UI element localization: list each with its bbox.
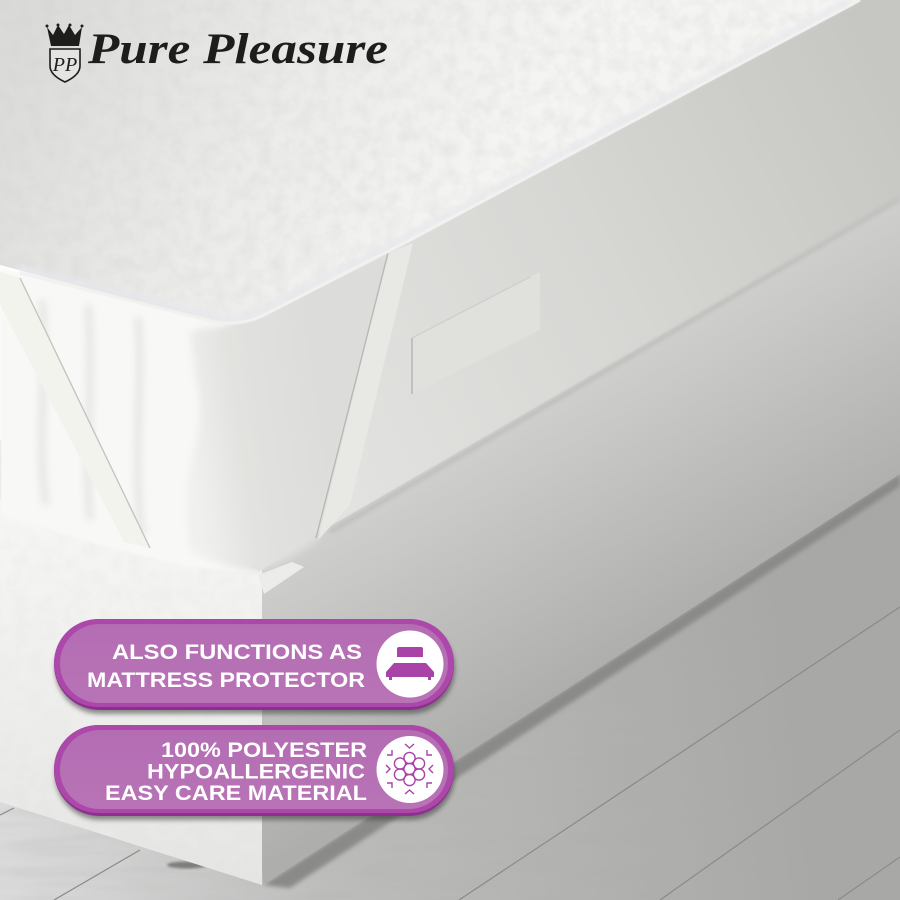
bed base: side face <box>240 170 900 885</box>
elastic strap: right <box>316 243 413 540</box>
feature pill: mattress protector <box>54 619 455 714</box>
pill text: HYPOALLERGENIC <box>147 760 365 784</box>
pill text: 100% POLYESTER <box>161 739 367 762</box>
feature pill: polyester material <box>54 725 455 820</box>
logo <box>46 24 388 82</box>
side handle <box>412 272 540 394</box>
pill text <box>105 739 367 805</box>
bed foot <box>167 862 207 868</box>
pill text: ALSO FUNCTIONS AS <box>112 641 362 664</box>
fitted strap corner on base <box>258 562 304 594</box>
icon: bed <box>376 630 444 698</box>
logo wordmark: Pure Pleasure <box>87 26 388 73</box>
floor <box>0 440 900 900</box>
elastic strap: left <box>0 272 150 548</box>
mattress: right side face <box>245 0 900 572</box>
bed base: front face <box>0 500 270 890</box>
logo crown <box>46 24 84 46</box>
mattress: front face with pocket tufts <box>0 268 255 573</box>
logo shield: PP <box>52 54 77 76</box>
icon: fibre cells <box>376 736 444 803</box>
mattress bottom shadow <box>330 199 900 532</box>
pill text <box>87 641 365 692</box>
logo shield <box>50 49 80 82</box>
pill text: EASY CARE MATERIAL <box>105 782 367 805</box>
fleece topper: top surface <box>0 0 900 340</box>
corner panel <box>187 255 388 572</box>
pill text: MATTRESS PROTECTOR <box>87 669 365 692</box>
